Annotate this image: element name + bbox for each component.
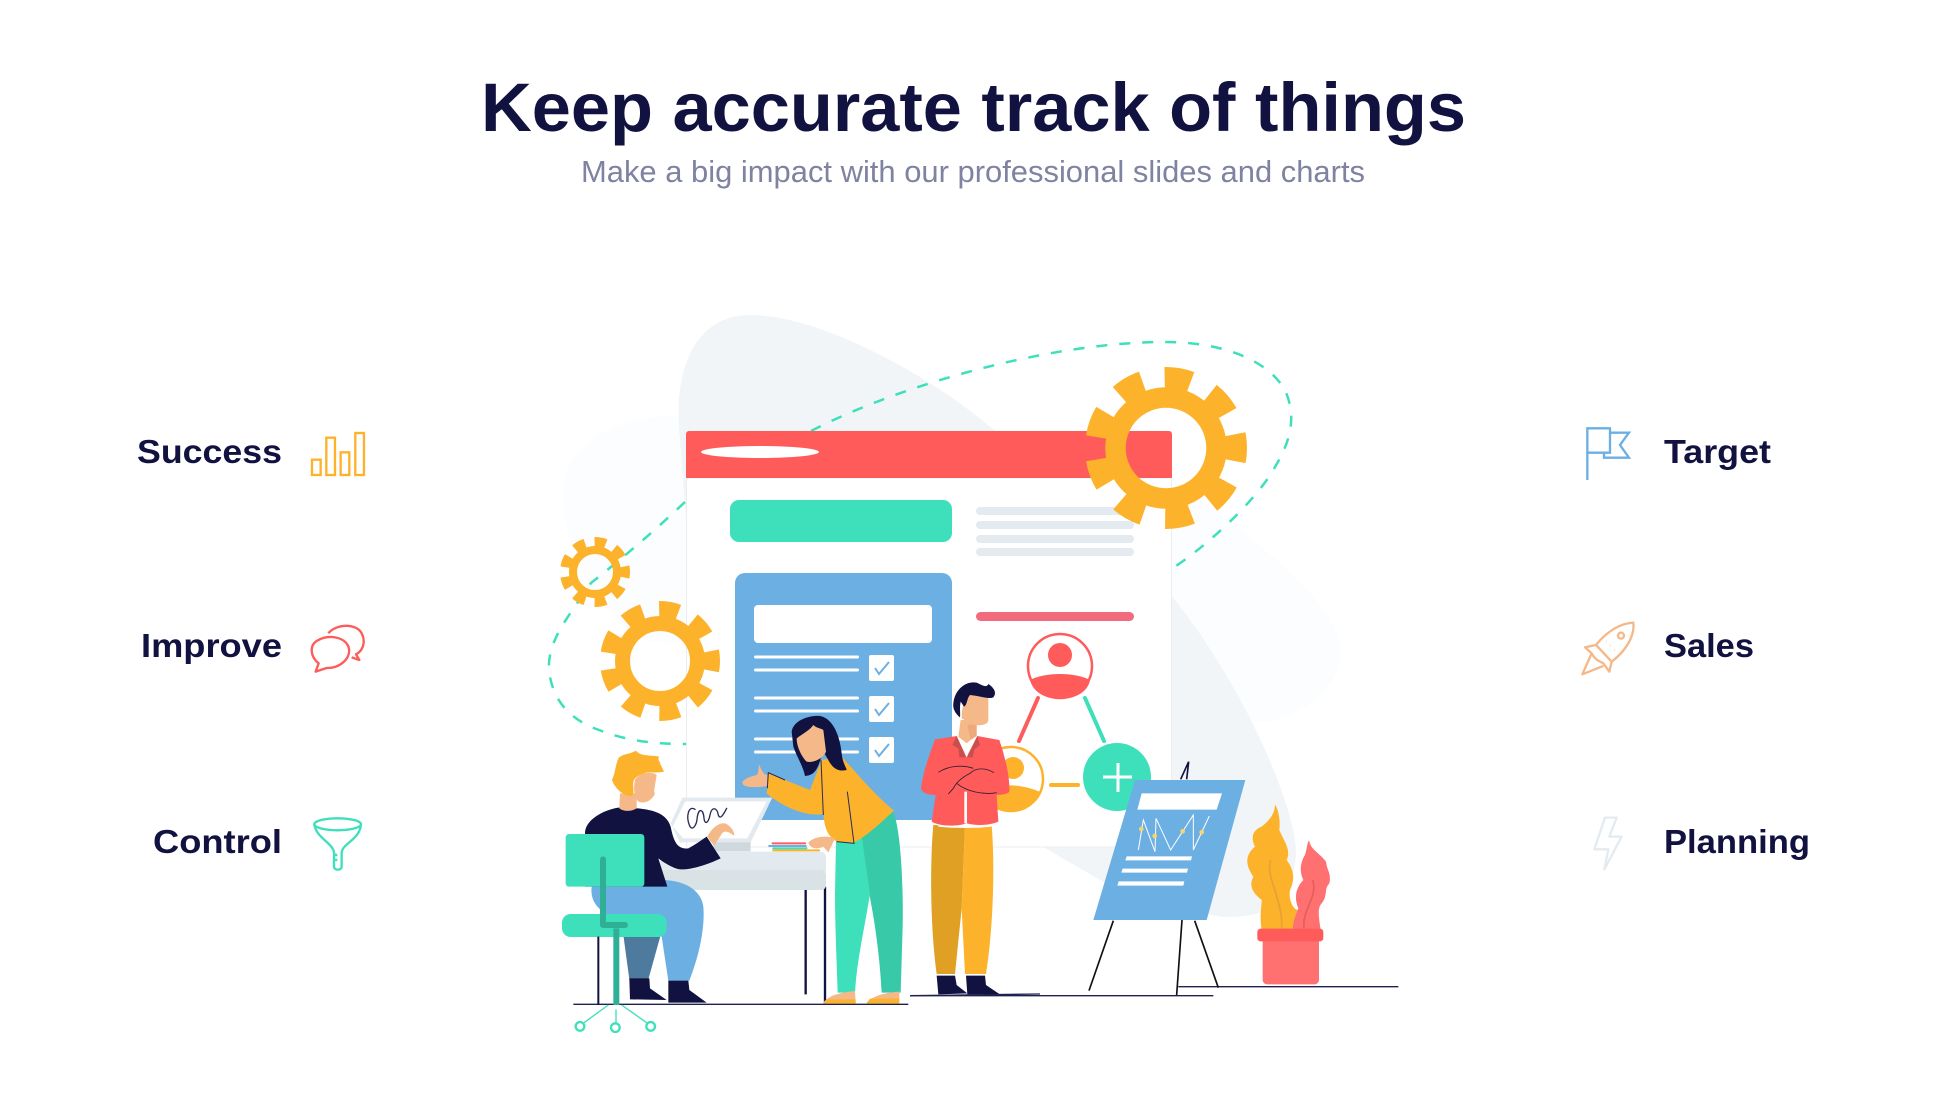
desk xyxy=(660,852,826,1003)
lower hand xyxy=(808,837,835,852)
title: Keep accurate track of things xyxy=(481,69,1466,146)
hair xyxy=(792,716,847,776)
shirt xyxy=(767,757,894,843)
shirt outlines xyxy=(767,760,854,843)
legs xyxy=(623,935,661,979)
face xyxy=(797,725,826,762)
label: Planning: Planning xyxy=(1664,823,1810,860)
person icon: orange xyxy=(979,747,1043,812)
plant xyxy=(1247,804,1330,984)
person icon: red xyxy=(1028,634,1092,699)
easel and plant scene xyxy=(910,762,1398,996)
torso and arm xyxy=(585,808,721,887)
desk scene: seated man, woman, standing man xyxy=(562,682,1040,1032)
face xyxy=(962,694,988,725)
label: Control: Control xyxy=(153,823,282,860)
white shirt hem xyxy=(938,823,992,828)
browser window xyxy=(686,431,1172,847)
connector lines xyxy=(1019,698,1104,785)
shirt collar xyxy=(959,742,973,757)
laptop xyxy=(671,798,772,851)
shoes xyxy=(937,976,967,994)
icon: funnel xyxy=(314,818,361,870)
window header bar xyxy=(686,431,1172,478)
label: Success: Success xyxy=(137,433,282,470)
icon: bar chart xyxy=(312,433,364,475)
easel xyxy=(1089,762,1245,995)
icon: speech bubbles xyxy=(312,626,364,672)
woman xyxy=(742,716,903,1003)
pointing hand xyxy=(742,764,767,787)
plus icon circle xyxy=(1083,743,1151,811)
feet xyxy=(824,991,856,1003)
subtitle: Make a big impact with our professional slides and charts xyxy=(581,154,1365,189)
flower pot xyxy=(1263,940,1319,984)
blue checklist panel xyxy=(735,573,952,820)
central illustration xyxy=(549,315,1398,1032)
seated man xyxy=(585,751,734,1003)
icon: flag xyxy=(1587,428,1629,480)
grey text lines xyxy=(976,507,1134,556)
hair xyxy=(953,682,995,717)
gear: medium xyxy=(608,609,712,713)
hand xyxy=(707,823,734,846)
hair xyxy=(612,751,664,796)
gear: large xyxy=(1096,378,1236,518)
gear: small xyxy=(565,542,625,602)
ground line xyxy=(573,994,1040,1004)
ground line xyxy=(910,987,1398,996)
label: Sales: Sales xyxy=(1664,627,1754,664)
front leg xyxy=(835,837,870,993)
icon: lightning bolt xyxy=(1594,818,1622,869)
jacket xyxy=(921,736,1009,826)
right column: labels with icons xyxy=(1582,428,1810,869)
dashed orbit path xyxy=(549,342,1291,744)
label: Improve: Improve xyxy=(141,627,282,664)
label: Target: Target xyxy=(1664,433,1771,470)
standing man xyxy=(921,682,1009,994)
left column: labels with icons xyxy=(137,433,364,870)
back leg xyxy=(862,812,903,993)
background blob: pale xyxy=(563,415,1340,723)
neck and face xyxy=(619,793,637,811)
pink bar xyxy=(976,612,1134,621)
office chair xyxy=(562,834,667,1032)
shoes xyxy=(629,978,667,1000)
trousers xyxy=(931,825,965,974)
window body xyxy=(686,478,1172,847)
header pill xyxy=(701,446,819,458)
books on desk xyxy=(768,842,820,851)
icon: rocket xyxy=(1582,623,1634,674)
mini line chart xyxy=(1138,815,1209,852)
neck xyxy=(958,720,977,743)
green heading block xyxy=(730,500,952,542)
crossed-arm lines xyxy=(938,766,997,794)
background blob: main xyxy=(678,315,1296,917)
